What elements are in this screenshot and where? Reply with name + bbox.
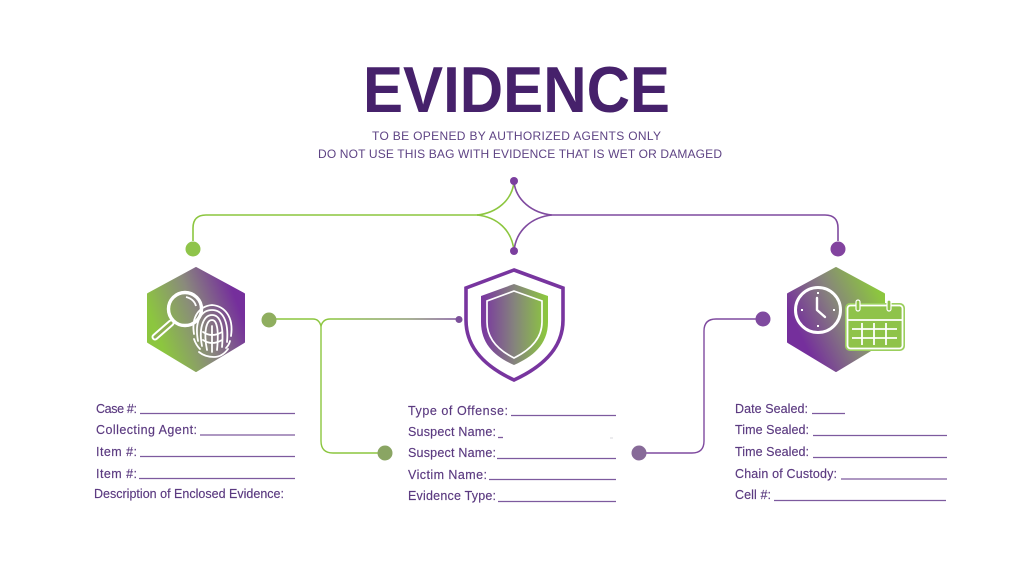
subtitle: DO NOT USE THIS BAG WITH EVIDENCE THAT IS WET OR DAMAGED [318,147,722,161]
form: case fields: Item #: [96,467,137,481]
subtitle [318,129,722,161]
form: sealing fields: Cell #: [735,488,771,502]
form: sealing fields: Chain of Custody: [735,467,837,481]
form: case fields: Description of Enclosed Evidence: [94,487,284,501]
form: offense fields: Suspect Name: [408,425,496,439]
form: offense fields: Type of Offense: [408,404,508,418]
icon: magnifier and fingerprint hexagon [148,268,244,371]
form: offense fields: Evidence Type: [408,489,496,503]
connector: top green branch [186,182,514,256]
connector: top purple branch [510,177,846,256]
magnifier [155,292,202,337]
connector: case to suspect fields [262,312,462,460]
calendar [846,300,904,350]
form: sealing fields: Time Sealed: [735,445,809,459]
form: offense fields [408,404,616,503]
form: sealing fields [735,402,947,502]
form: sealing fields: Time Sealed: [735,423,809,437]
title: EVIDENCE [363,53,670,126]
form: offense fields: Victim Name: [408,468,487,482]
fingerprint [193,305,232,357]
form: case fields: Collecting Agent: [96,423,197,437]
form: sealing fields: Date Sealed: [735,402,808,416]
icon: clock and calendar hexagon [788,268,904,371]
subtitle: TO BE OPENED BY AUTHORIZED AGENTS ONLY [372,129,661,143]
clock [796,288,840,332]
form: case fields: Case #: [96,402,137,416]
form: case fields: Item #: [96,445,137,459]
form: case fields [94,402,295,501]
connector: time to offense fields [632,312,770,460]
form: offense fields: Suspect Name: [408,446,496,460]
icon: shield [466,270,563,380]
